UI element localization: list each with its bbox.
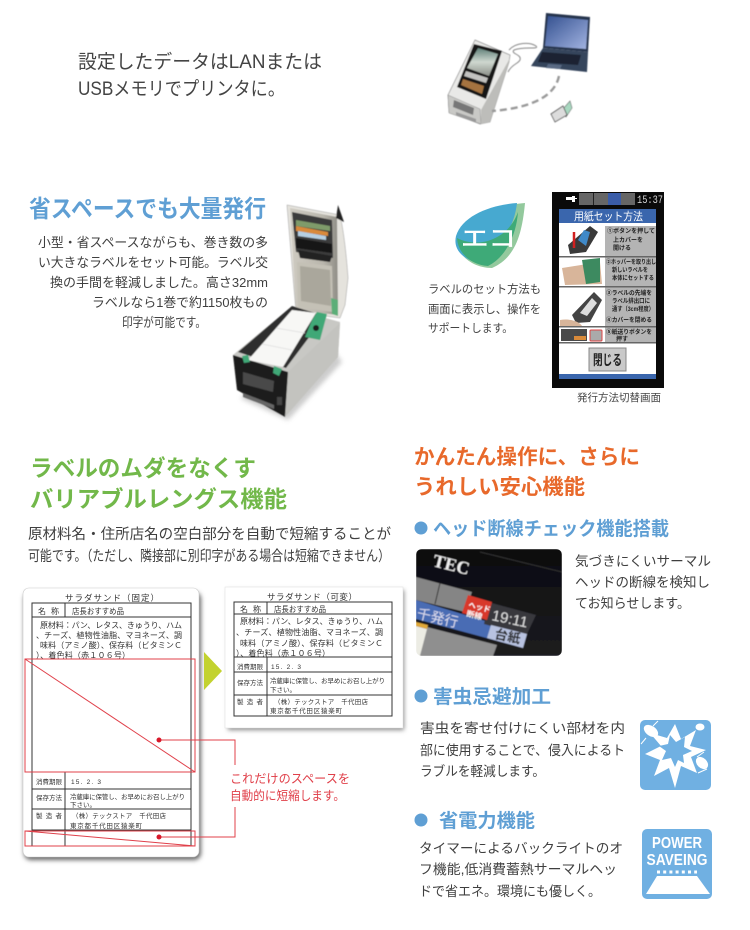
panel: variable length label (225, 587, 404, 730)
heading: easy operation and safety features: かんたん操作に、さらに (414, 446, 640, 469)
heading: easy operation and safety features: うれしい安心機能 (414, 476, 585, 499)
text block: variable length description: 原材料名・住所店名の空白部分を自動で短縮することが (28, 526, 391, 543)
text block: label set instructions: ラベルのセット方法も (428, 282, 541, 296)
image: printer panel with head error display: 台紙 (493, 626, 522, 646)
panel: touch screen showing paper setting method: 新しいラベルを (612, 266, 648, 274)
panel: variable length label: ）、着色料（赤１０６号） (236, 648, 330, 658)
text block: label set instructions: サポートします。 (428, 322, 513, 335)
panel: fixed length label: 味料（アミノ酸）、保存料（ビタミンＣ (40, 640, 182, 650)
panel: fixed length label: ）、着色料（赤１０６号） (36, 650, 130, 660)
text block: head break check description: ヘッドの断線を検知し (575, 574, 710, 590)
panel: fixed length label: 店長おすすめ品 (72, 607, 124, 616)
panel: touch screen showing paper setting method: ④カバーを閉める (606, 316, 652, 324)
panel: touch screen showing paper setting method: ③ラベルの先端を (606, 289, 652, 297)
panel: fixed length label: 下さい。 (70, 801, 96, 809)
panel: variable length label: 消費期限 (237, 662, 264, 671)
panel: fixed length label: 東京都千代田区猿楽町 (70, 821, 142, 830)
panel: touch screen showing paper setting method (552, 192, 664, 388)
text block: space saving description: 小型・省スペースながらも、巻き数の多 (38, 235, 268, 250)
image: printer panel with head error display (415, 549, 562, 656)
text block: label set instructions (428, 282, 541, 335)
panel: touch screen showing paper setting method: ①ボタンを押して (607, 227, 655, 235)
text block: space saving description: 換の手間を軽減しました。高さ32mm (50, 275, 268, 290)
image: printer panel with head error display: 千発行 (415, 605, 460, 630)
panel: variable length label: 東京都千代田区猿楽町 (270, 706, 342, 715)
text block: insect repellent description: ラブルを軽減します。 (420, 763, 545, 779)
panel: touch screen showing paper setting method: ⑤紙送りボタンを (606, 328, 652, 336)
illustration: printer connected to laptop and USB memory (448, 13, 590, 124)
panel: fixed length label: （株）テックストア 千代田店 (72, 811, 166, 820)
text block: variable length description: 可能です。（ただし、隣接部に別印字がある場合は短縮できません） (28, 548, 390, 565)
panel: variable length label: 15. 2. 3 (271, 664, 301, 671)
panel: variable length label: 保存方法 (237, 678, 264, 687)
panel: variable length label: サラダサンド（可変） (267, 592, 357, 602)
text block: insect repellent description: 部に使用することで、侵入によるト (420, 742, 625, 758)
panel: touch screen showing paper setting method: 本体にセットする (612, 274, 654, 282)
heading: variable length function: ラベルのムダをなくす (30, 455, 256, 481)
panel: fixed length label (23, 588, 201, 860)
callout text: shortened space: 自動的に短縮します。 (230, 788, 345, 803)
arrow: fixed to variable (204, 652, 222, 690)
panel: variable length label: 冷蔵庫に保管し、お早めにお召し上がり (270, 676, 385, 685)
panel: fixed length label: 消費期限 (36, 777, 62, 786)
subheading: power saving: 省電力機能 (439, 810, 535, 832)
panel: variable length label: 原材料：パン、レタス、きゅうり、ハム (240, 616, 383, 626)
icon: power saving: SAVEING (646, 852, 708, 869)
heading: variable length function (30, 455, 287, 512)
panel: touch screen showing paper setting method: 閉じる (593, 352, 622, 368)
panel: fixed length label: 原材料：パン、レタス、きゅうり、ハム (40, 620, 182, 630)
panel: touch screen showing paper setting method: 押す (616, 335, 628, 343)
icon: power saving (642, 829, 712, 899)
panel: fixed length label: 、チーズ、植物性油脂、マヨネーズ、調 (36, 630, 182, 640)
panel: fixed length label: 冷蔵庫に保管し、お早めにお召し上がり (70, 792, 185, 801)
text block: power saving description (419, 841, 623, 899)
text block: space saving description: い大きなラベルをセット可能。ラベル交 (38, 255, 268, 270)
callout: shortened space leader lines (156, 738, 235, 840)
intro text: data via LAN or USB: USBメモリでプリンタに。 (78, 78, 285, 100)
heading: space saving: 省スペースでも大量発行 (29, 196, 266, 223)
image: printer panel with head error display: 19:11 (490, 607, 529, 631)
text block: variable length description (28, 526, 391, 565)
panel: fixed length label: 製 造 者 (36, 811, 62, 820)
panel: touch screen showing paper setting method: ラベル排出口に (612, 297, 650, 305)
panel: fixed length label: サラダサンド（固定） (65, 593, 159, 603)
panel: variable length label: 下さい。 (270, 686, 296, 694)
panel: variable length label: 名 称 (240, 604, 261, 614)
panel: touch screen showing paper setting method: 上カバーを (613, 236, 643, 244)
panel: fixed length label: 15. 2. 3 (71, 779, 101, 786)
callout text: shortened space: これだけのスペースを (230, 772, 350, 786)
text block: power saving description: タイマーによるバックライトのオ (419, 841, 623, 856)
image: printer panel with head error display: TEC (431, 550, 472, 579)
icon: eco leaf: エコ (461, 225, 516, 251)
panel: variable length label: 店長おすすめ品 (274, 605, 326, 614)
text block: label set instructions: 画面に表示し、操作を (428, 302, 541, 316)
text block: space saving description (38, 235, 268, 330)
image: printer panel with head error display: ヘッド (468, 600, 492, 614)
icon: insect repellent burst (640, 720, 711, 790)
text block: head break check description: てお知らせします。 (575, 595, 690, 611)
icon: eco leaf (455, 203, 525, 268)
panel: fixed length label: 保存方法 (36, 793, 62, 802)
panel: touch screen showing paper setting method: ②ホッパーを取り出し (606, 258, 656, 266)
text block: head break check description (575, 554, 711, 611)
heading: easy operation and safety features (414, 446, 640, 499)
text block: space saving description: ラベルなら1巻で約1150枚もの (92, 295, 268, 310)
panel: fixed length label: 名 称 (38, 606, 59, 616)
panel: touch screen showing paper setting method: 15:37 (637, 195, 663, 207)
intro text: data via LAN or USB (78, 51, 322, 100)
icon: power saving: POWER (652, 835, 702, 852)
caption: screen name: 発行方法切替画面 (577, 391, 661, 404)
panel: touch screen showing paper setting method: 開ける (613, 245, 631, 252)
illustration: open printer with label roll (233, 205, 348, 420)
subheading: head break check: ヘッド断線チェック機能搭載 (433, 518, 669, 540)
subheading: insect repellent processing: 害虫忌避加工 (433, 686, 551, 708)
panel: touch screen showing paper setting method: 用紙セット方法 (574, 209, 643, 223)
text block: insect repellent description: 害虫を寄せ付けにくい部材を内 (420, 721, 625, 736)
intro text: data via LAN or USB: 設定したデータはLANまたは (78, 51, 322, 73)
panel: touch screen showing paper setting method: 通す（3cm程度） (612, 305, 654, 313)
text block: insect repellent description (420, 721, 625, 779)
panel: variable length label: 、チーズ、植物性油脂、マヨネーズ、調 (236, 627, 383, 637)
panel: variable length label: 製 造 者 (237, 697, 264, 706)
text block: head break check description: 気づきにくいサーマル (575, 554, 711, 569)
text block: power saving description: ドで省エネ。環境にも優しく。 (419, 884, 601, 899)
panel: variable length label: （株）テックストア 千代田店 (274, 697, 368, 706)
callout text: shortened space (230, 772, 350, 803)
image: printer panel with head error display: 断線 (466, 608, 483, 622)
panel: variable length label: 味料（アミノ酸）、保存料（ビタミンＣ (240, 638, 383, 648)
text block: power saving description: フ機能,低消費蓄熱サーマルヘッ (419, 862, 617, 877)
heading: variable length function: バリアブルレングス機能 (30, 486, 287, 512)
text block: space saving description: 印字が可能です。 (122, 315, 206, 330)
